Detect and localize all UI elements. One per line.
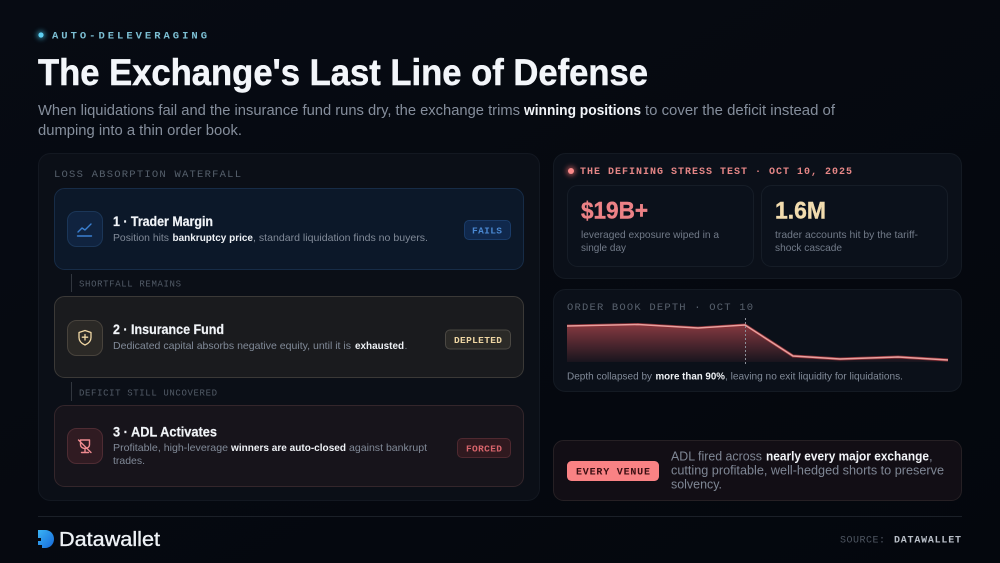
card description: Dedicated capital absorbs negative equity, until it is [113, 340, 351, 352]
source: DATAWALLET [894, 536, 961, 546]
icon: shield plus [68, 320, 102, 356]
panel: loss absorption waterfall [38, 154, 540, 500]
badge: every venue [567, 461, 659, 481]
card description: , standard liquidation finds no buyers. [253, 232, 428, 244]
card title: 1 · Trader Margin [113, 214, 213, 229]
connector: shortfall remains [72, 274, 181, 292]
card title: 2 · Insurance Fund [113, 322, 224, 337]
source: SOURCE: [840, 536, 885, 546]
subtitle: When liquidations fail and the insurance fund runs dry, the exchange trims [38, 102, 520, 119]
subtitle [38, 102, 836, 139]
callout text: cutting profitable, well-hedged shorts to preserve [671, 462, 944, 478]
card description: Position hits [113, 232, 169, 244]
panel: stress test [554, 154, 962, 278]
badge: fails [464, 220, 510, 240]
icon: chart line [68, 212, 102, 246]
subtitle: winning positions [523, 102, 641, 119]
icon: trophy crossed out [68, 428, 102, 464]
badge: fails: FAILS [472, 226, 502, 236]
source [840, 536, 961, 546]
card: adl activates [54, 406, 524, 486]
panel heading: ORDER BOOK DEPTH · OCT 10 [567, 302, 753, 314]
area chart [567, 318, 948, 365]
card description [113, 442, 427, 467]
stat: accounts hit: trader accounts hit by the tariff- [775, 229, 918, 241]
chart caption: , leaving no exit liquidity for liquidations. [725, 370, 903, 382]
card description: against bankrupt [349, 442, 427, 454]
callout text: nearly every major exchange [766, 448, 929, 464]
panel heading: LOSS ABSORPTION WATERFALL [54, 169, 241, 181]
badge: depleted [446, 330, 510, 349]
badge: forced [458, 438, 510, 458]
stat: exposure wiped: $19B+ [581, 198, 648, 224]
stat: exposure wiped: leveraged exposure wiped in a [581, 229, 719, 241]
card title: 3 · ADL Activates [113, 424, 217, 440]
stat: exposure wiped [568, 186, 754, 266]
badge: forced: FORCED [466, 444, 502, 454]
panel: order book depth [554, 290, 962, 392]
logo mark [38, 530, 54, 548]
connector: shortfall remains: SHORTFALL REMAINS [79, 280, 181, 290]
badge: depleted: DEPLETED [454, 335, 502, 346]
callout text [671, 448, 944, 492]
subtitle: to cover the deficit instead of [645, 102, 836, 119]
stat: exposure wiped: single day [581, 242, 627, 254]
chart caption: more than 90% [656, 370, 726, 382]
callout text: , [929, 448, 933, 464]
card description: bankruptcy price [172, 232, 253, 244]
card description: winners are auto-closed [230, 442, 346, 454]
logo wordmark: Datawallet [59, 529, 160, 551]
chart caption [567, 370, 903, 382]
eyebrow: AUTO-DELEVERAGING [52, 30, 207, 42]
badge: every venue: EVERY VENUE [576, 468, 650, 478]
card description: trades. [113, 455, 145, 467]
card description: . [404, 340, 407, 352]
panel heading: THE DEFINING STRESS TEST · OCT 10, 2025 [580, 167, 852, 178]
panel: every venue callout [554, 440, 962, 500]
footer [38, 516, 962, 551]
connector: deficit still uncovered: DEFICIT STILL UNCOVERED [79, 388, 217, 398]
chart caption: Depth collapsed by [567, 370, 653, 382]
card description [113, 232, 428, 244]
title: The Exchange's Last Line of Defense [38, 52, 648, 93]
stat: accounts hit: 1.6M [775, 198, 826, 224]
card description: Profitable, high-leverage [113, 442, 228, 454]
card: trader margin [54, 188, 524, 270]
status dot [566, 166, 576, 176]
card: insurance fund [54, 296, 524, 378]
card description: exhausted [355, 340, 404, 352]
stat: accounts hit [762, 186, 948, 266]
callout text: solvency. [671, 476, 722, 492]
subtitle: dumping into a thin order book. [38, 122, 242, 139]
callout text: ADL fired across [671, 448, 762, 464]
stat: accounts hit: shock cascade [775, 242, 842, 254]
